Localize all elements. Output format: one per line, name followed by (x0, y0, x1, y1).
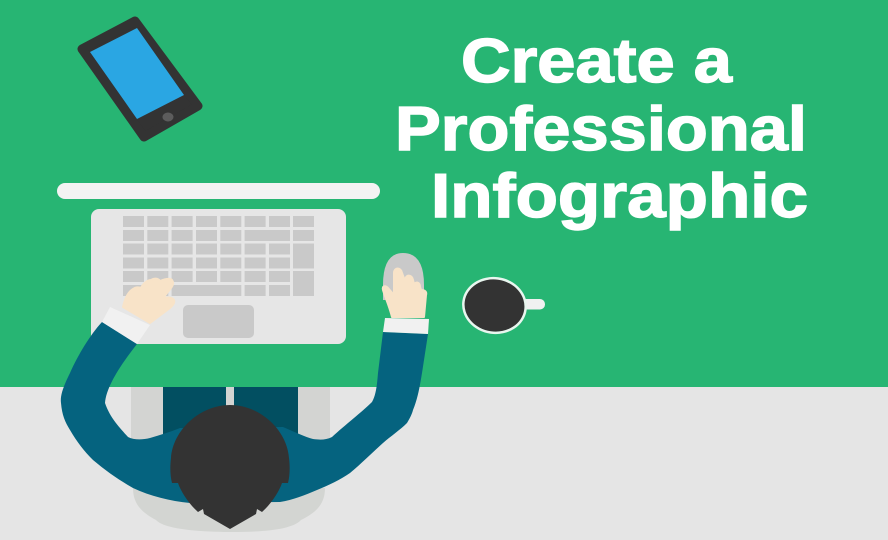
title: Create a (461, 27, 733, 96)
laptop (91, 209, 346, 344)
icon: coffee cup (458, 273, 545, 338)
icon: tablet (82, 21, 198, 137)
grey floor (0, 387, 888, 540)
keyboard (123, 216, 314, 296)
left hand (123, 279, 174, 323)
person (61, 268, 429, 529)
torso and arms (61, 322, 428, 503)
chair shadow (133, 488, 325, 532)
title (395, 27, 808, 231)
title: Infographic (431, 162, 808, 231)
head (170, 405, 290, 529)
title: Professional (395, 95, 807, 164)
left cuff (102, 307, 150, 344)
right hand (383, 268, 426, 317)
green wall background (0, 0, 888, 387)
right cuff (383, 318, 429, 334)
touchpad (183, 305, 254, 338)
desk edge (57, 183, 380, 199)
icon: mouse (383, 253, 424, 300)
chair (131, 387, 330, 443)
